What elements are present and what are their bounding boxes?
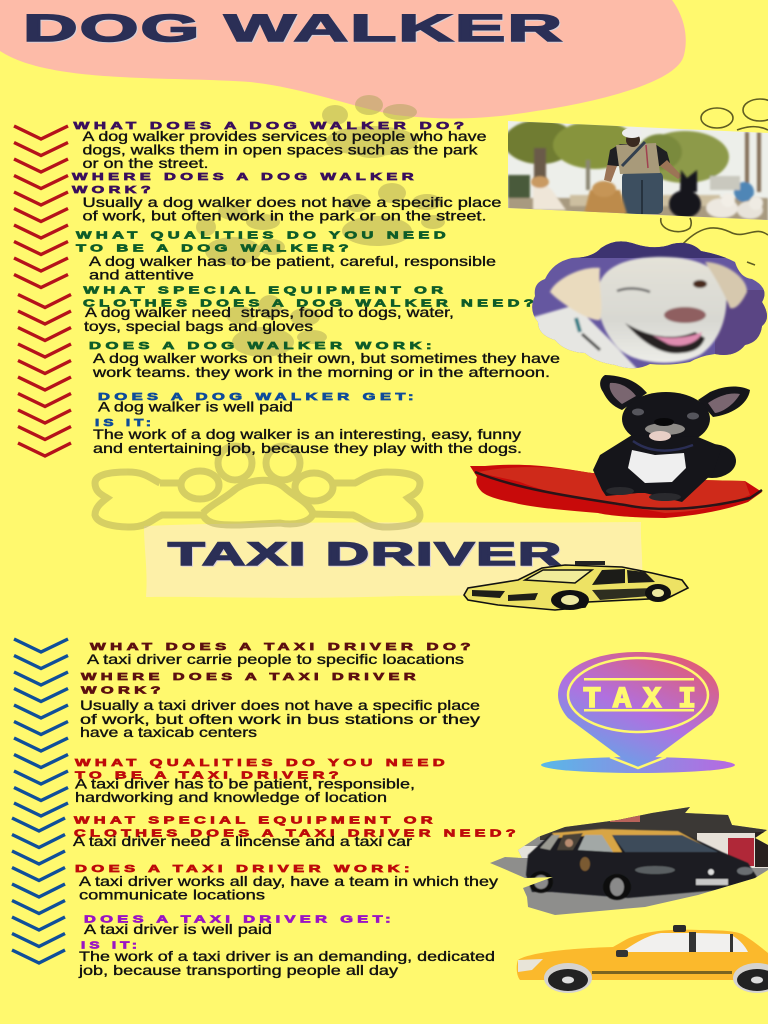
text block: does a dog walker get: A dog walker is well paid [98, 400, 293, 414]
text block: where does a taxi driver work [80, 672, 480, 740]
text block: does a dog walker work: work teams. they work in the morning or in the afternoon. [92, 365, 550, 380]
text block: taxi is it: IS IT: [81, 941, 141, 952]
text block: is it [93, 418, 522, 456]
text block: equipment: CLOTHES DOES A DOG WALKER NEED? [83, 298, 538, 309]
text block: taxi qualities: hardworking and knowledge of location [75, 790, 387, 805]
text block: taxi qualities [75, 758, 449, 805]
text block: where does a taxi driver work: Usually a taxi driver does not have a specific place [80, 698, 480, 713]
text block: taxi equipment: CLOTHES DOES A TAXI DRIVER NEED? [74, 829, 520, 840]
photo: black taxi car [490, 805, 768, 917]
text block: does a dog walker work: DOES A DOG WALKER WORK: [89, 341, 436, 352]
text block: qualities: WHAT QUALITIES DO YOU NEED [76, 230, 450, 242]
text block: qualities: TO BE A DOG WALKER? [76, 244, 353, 254]
icon: taxi map pin: TAXI [583, 683, 696, 717]
text block: what does a dog walker do: WHAT DOES A DOG WALKER DO? [74, 121, 468, 132]
text block: what does a dog walker do: dogs, walks them in open spaces such as the park [82, 142, 478, 158]
photo: man walking dogs [504, 120, 768, 222]
pink header blob [0, 0, 686, 118]
illustration: yellow taxi car [517, 925, 768, 993]
text block: where does a dog walker work: of work, but often work in the park or on the street. [82, 208, 486, 224]
text block: what does a dog walker do: or on the street. [82, 156, 208, 171]
text block: does a taxi driver work: A taxi driver works all day, have a team in which they [79, 874, 498, 889]
text block: where does a dog walker work [72, 172, 502, 224]
dogs [531, 170, 763, 219]
text block: does a dog walker work: A dog walker works on their own, but sometimes they have [93, 351, 560, 366]
text block: taxi qualities: A taxi driver has to be patient, responsible, [75, 776, 415, 792]
text block: qualities: and attentive [89, 267, 194, 282]
text block: taxi equipment: A taxi driver need a lincense and a taxi car [73, 834, 413, 849]
text block: does a dog walker get: DOES A DOG WALKER GET: [98, 392, 418, 403]
text block: where does a taxi driver work: WORK? [81, 685, 165, 696]
text block: what does a taxi driver do: WHAT DOES A TAXI DRIVER DO? [90, 642, 475, 653]
text block: where does a dog walker work: WORK? [72, 185, 155, 196]
icon: taxi map pin [541, 652, 735, 773]
photo: french bulldog on red cushion [470, 375, 762, 518]
text block: taxi is it: job, because transporting people all day [78, 963, 398, 978]
text block: taxi is it: The work of a taxi driver is an demanding, dedicated [79, 949, 495, 964]
banner: taxi driver [144, 522, 642, 598]
text block: where does a dog walker work: WHERE DOES A DOG WALKER [72, 172, 418, 183]
text block: is it: The work of a dog walker is an interesting, easy, funny [93, 427, 521, 442]
text block: equipment: A dog walker need straps, food to dogs, water, [85, 305, 454, 320]
chevrons: dog walker section [14, 126, 71, 456]
title: taxi driver: TAXI DRIVER [168, 536, 563, 572]
text block: does a taxi driver get: DOES A TAXI DRIVER GET: [84, 914, 395, 925]
text block: what does a dog walker do [74, 121, 487, 171]
text block: taxi is it [78, 941, 495, 978]
photo: smiling white dog [530, 240, 768, 372]
icon: sketched nyc taxi [464, 561, 688, 610]
text block: does a taxi driver get: A taxi driver is well paid [84, 922, 272, 937]
text block: where does a taxi driver work: have a taxicab centers [80, 725, 257, 740]
text block: what does a taxi driver do [87, 642, 475, 667]
man [604, 128, 682, 214]
text block: where does a dog walker work: Usually a dog walker does not have a specific place [82, 195, 502, 210]
text block: taxi equipment [73, 815, 520, 849]
text block: does a taxi driver work: communicate locations [79, 888, 265, 903]
text block: equipment: toys, special bags and gloves [84, 319, 313, 334]
text block: where does a taxi driver work: of work, but often work in bus stations or they [80, 712, 480, 727]
text block: equipment [83, 285, 538, 334]
text block: does a taxi driver work: DOES A TAXI DRIVER WORK: [75, 864, 414, 875]
text block: qualities [76, 230, 496, 282]
chevrons: taxi driver section [12, 639, 68, 963]
text block: taxi qualities: WHAT QUALITIES DO YOU NEED [75, 758, 449, 769]
text block: equipment: WHAT SPECIAL EQUIPMENT OR [84, 285, 448, 296]
decorative loops [661, 99, 768, 265]
paw watermarks [196, 95, 445, 357]
text block: is it: IS IT: [95, 418, 155, 429]
dog [593, 375, 750, 502]
text block: qualities: A dog walker has to be patient, careful, responsible [89, 254, 496, 269]
text block: what does a dog walker do: A dog walker provides services to people who have [82, 129, 487, 144]
text block: does a dog walker get [98, 392, 418, 414]
text block: does a taxi driver get [84, 914, 395, 937]
title: dog walker: DOG WALKER [23, 8, 564, 50]
text block: what does a taxi driver do: A taxi driver carrie people to specific loacations [87, 652, 464, 667]
bone and paw outline [95, 446, 420, 527]
text block: is it: and entertaining job, because they play with the dogs. [93, 441, 522, 456]
text block: taxi qualities: TO BE A TAXI DRIVER? [75, 771, 343, 782]
text block: does a taxi driver work [75, 864, 498, 903]
cushion [470, 465, 762, 518]
text block: where does a taxi driver work: WHERE DOES A TAXI DRIVER [81, 672, 420, 683]
text block: taxi equipment: WHAT SPECIAL EQUIPMENT OR [74, 815, 437, 826]
text block: does a dog walker work [89, 341, 560, 380]
